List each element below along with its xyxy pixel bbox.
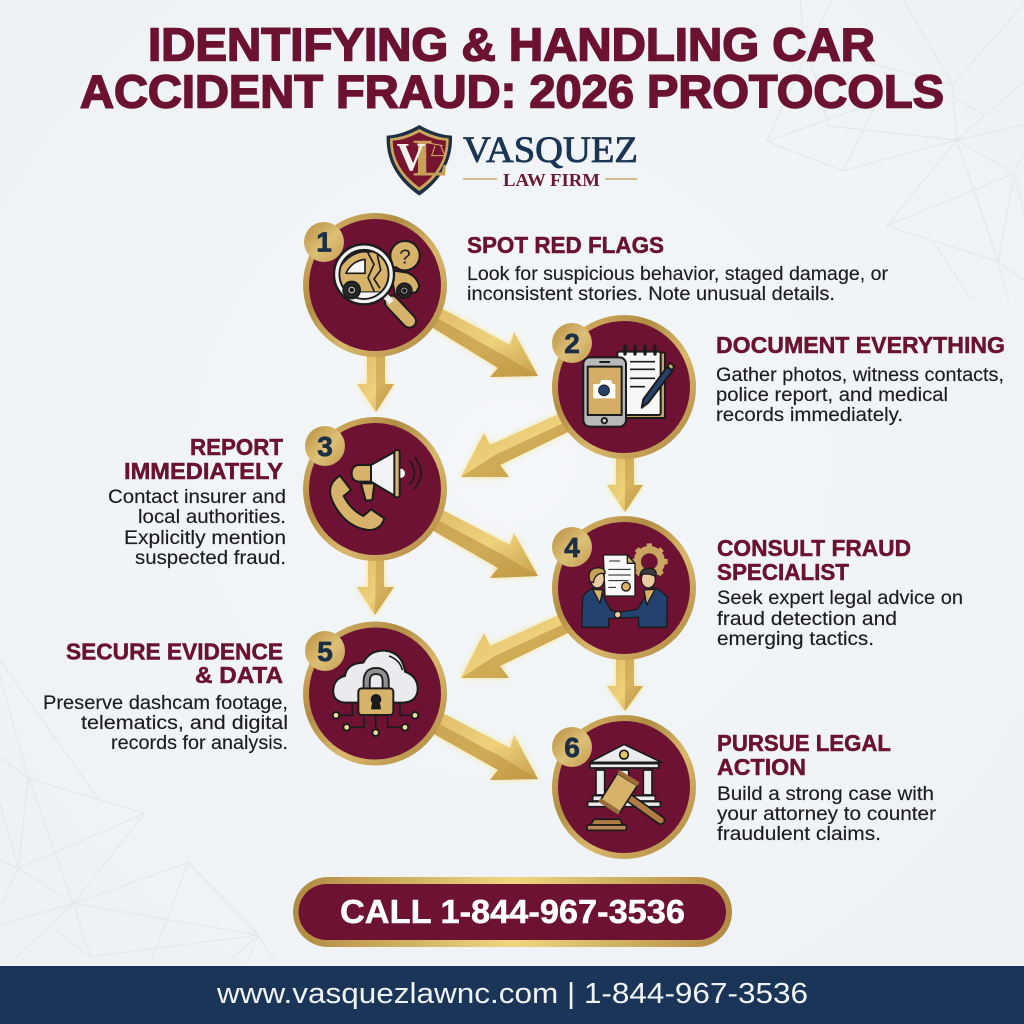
- text: step 1: SPOT RED FLAGS: [467, 232, 664, 258]
- text: step 3: local authorities.: [138, 507, 286, 528]
- text: step 6: PURSUE LEGAL: [717, 730, 891, 756]
- panel: step 1 spot red flags: [303, 213, 447, 357]
- title: IDENTIFYING & HANDLING CAR: [148, 18, 875, 70]
- icon: phone and notepad: [583, 346, 674, 427]
- text: step 2: police report, and medical: [716, 385, 948, 406]
- text: step 6: ACTION: [717, 754, 806, 780]
- badge: number 5: 5: [317, 636, 333, 667]
- icon: handshake with contract and gear: [582, 543, 668, 627]
- text: step 5: records for analysis.: [111, 733, 288, 754]
- icon: phone and megaphone: [330, 450, 421, 530]
- arrow: step 1 to step 3: [357, 355, 394, 412]
- text: step 2: DOCUMENT EVERYTHING: [716, 332, 1005, 358]
- text: step 4: [717, 535, 963, 650]
- text: step 5: Preserve dashcam footage,: [43, 693, 288, 714]
- badge: number 5: [305, 631, 345, 671]
- title: [80, 18, 944, 118]
- text: step 4: Seek expert legal advice on: [717, 588, 963, 609]
- arrow: step 3 to step 4: [425, 506, 538, 578]
- text: step 3: Explicitly mention: [124, 528, 286, 549]
- icon: magnifier over damaged car: [334, 241, 420, 321]
- text: step 1: Look for suspicious behavior, staged damage, or: [467, 264, 889, 285]
- arrow: step 2 to step 3: [461, 410, 572, 477]
- panel: step 3 report immediately: [303, 417, 447, 561]
- badge: number 6: [552, 727, 592, 767]
- text: step 6: your attorney to counter: [717, 804, 937, 825]
- logo subtitle: LAW FIRM: [503, 170, 600, 190]
- footer bar: www.vasquezlawnc.com | 1-844-967-3536: [216, 978, 808, 1010]
- logo wordmark: VASQUEZ: [463, 130, 638, 171]
- arrow: step 3 to step 5: [357, 559, 394, 615]
- arrow: step 5 to step 6: [425, 709, 538, 780]
- icon: shield: [387, 125, 452, 196]
- arrow: step 2 to step 4: [607, 456, 643, 512]
- text: step 3: Contact insurer and: [108, 487, 286, 508]
- text: step 3: [108, 434, 286, 569]
- title: ACCIDENT FRAUD: 2026 PROTOCOLS: [80, 66, 944, 118]
- background pattern: bottom left: [0, 660, 273, 960]
- panel: step 6 pursue legal action: [552, 715, 696, 859]
- footer bar: [0, 966, 1024, 1024]
- panel: step 4 consult fraud specialist: [552, 516, 696, 660]
- background pattern: top right: [767, 0, 1024, 300]
- arrow: step 4 to step 6: [607, 657, 643, 711]
- icon: shield: V: [397, 134, 426, 179]
- text: step 3: suspected fraud.: [135, 548, 286, 569]
- badge: number 3: [305, 426, 345, 466]
- panel: step 5 secure evidence and data: [303, 622, 447, 766]
- badge: number 4: [552, 527, 592, 567]
- arrow: step 4 to step 5: [461, 611, 572, 678]
- text: step 3: IMMEDIATELY: [124, 458, 283, 484]
- logo: Vasquez Law Firm: [387, 125, 638, 196]
- text: step 5: [43, 638, 288, 754]
- text: step 5: telematics, and digital: [81, 713, 288, 734]
- icon: shield: L: [413, 128, 448, 188]
- call to action button: [293, 877, 732, 947]
- badge: number 2: [552, 323, 592, 363]
- text: step 6: fraudulent claims.: [717, 824, 881, 845]
- text: step 2: Gather photos, witness contacts,: [716, 365, 1004, 386]
- text: step 4: fraud detection and: [717, 609, 897, 630]
- badge: number 2: 2: [564, 328, 580, 359]
- text: step 2: [716, 332, 1005, 426]
- icon: cloud with padlock: [333, 651, 418, 736]
- text: step 6: Build a strong case with: [717, 784, 934, 805]
- icon: magnifier over damaged car: ?: [399, 245, 411, 268]
- text: step 4: emerging tactics.: [717, 629, 874, 650]
- call to action button: CALL 1-844-967-3536: [340, 893, 685, 930]
- badge: number 3: 3: [317, 431, 333, 462]
- text: step 1: inconsistent stories. Note unusual details.: [467, 284, 835, 305]
- badge: number 1: [304, 222, 344, 262]
- text: step 6: [717, 730, 937, 845]
- text: step 5: & DATA: [195, 662, 283, 688]
- text: step 5: SECURE EVIDENCE: [66, 638, 283, 664]
- text: step 4: CONSULT FRAUD: [717, 535, 911, 561]
- text: step 2: records immediately.: [716, 405, 903, 426]
- text: step 4: SPECIALIST: [717, 559, 849, 585]
- badge: number 6: 6: [564, 732, 580, 763]
- panel: step 2 document everything: [552, 315, 696, 459]
- text: step 3: REPORT: [190, 434, 283, 460]
- badge: number 1: 1: [316, 226, 332, 258]
- icon: courthouse and gavel: [587, 744, 662, 830]
- text: step 1: [467, 232, 889, 305]
- badge: number 4: 4: [564, 532, 580, 563]
- arrow: step 1 to step 2: [425, 305, 538, 377]
